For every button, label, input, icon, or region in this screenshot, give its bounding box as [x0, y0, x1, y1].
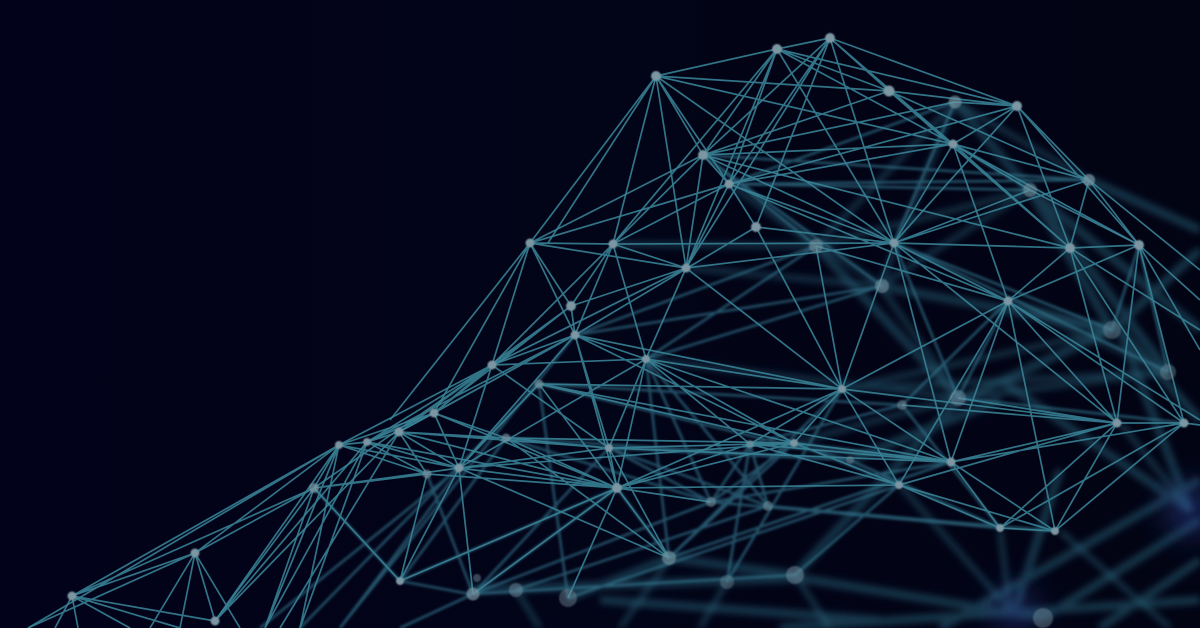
blue glow spots — [995, 486, 1200, 628]
blurred background mesh — [470, 102, 1200, 628]
soft mid-focus lines — [260, 102, 1184, 628]
